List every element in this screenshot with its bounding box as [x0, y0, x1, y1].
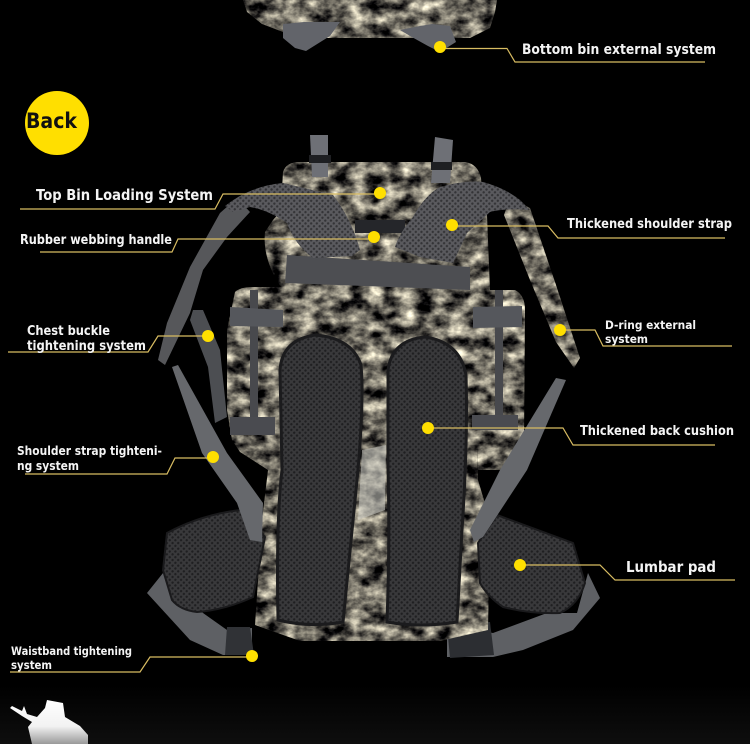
callout dots: [202, 41, 566, 662]
label: d-ring external system: [605, 318, 696, 346]
label: thickened back cushion: Thickened back cushion: [580, 424, 734, 439]
icon: soldier silhouette: [10, 700, 88, 744]
left side pocket: [227, 287, 290, 470]
label: thickened shoulder strap: Thickened shoulder strap: [567, 217, 732, 232]
rubber handle: [355, 220, 405, 233]
label: chest buckle tightening system: [27, 324, 146, 354]
right top tab: [431, 137, 453, 183]
label: chest buckle tightening system: tightening system: [27, 339, 146, 354]
left lumbar pad: [163, 510, 265, 612]
right shoulder strap: [504, 198, 580, 368]
tab buckle right: [431, 162, 452, 170]
back badge: Back: [26, 109, 78, 133]
top lid: [282, 162, 482, 190]
waist strap right: [447, 573, 600, 657]
label: shoulder strap tightening system: Shoulder strap tighteni-: [17, 444, 162, 458]
label: shoulder strap tightening system: [17, 444, 162, 473]
right pocket vertical strap: [495, 290, 503, 420]
lower right pocket band: [472, 415, 518, 430]
left back cushion: [278, 335, 362, 625]
lower left pocket band: [230, 417, 275, 435]
back badge: [25, 91, 89, 155]
label: d-ring external system: D-ring external: [605, 318, 696, 332]
left pocket band: [230, 307, 283, 327]
waist buckle left: [225, 627, 254, 655]
left tightening strap: [172, 365, 263, 542]
left shoulder strap: [158, 198, 250, 365]
right bottom webbing: [400, 24, 456, 52]
bottom bin of backpack: [243, 0, 497, 52]
grey back band: [285, 255, 470, 290]
waist strap left: [147, 573, 252, 655]
right shoulder pad: [395, 182, 530, 263]
tab buckle left: [309, 155, 331, 163]
left pocket vertical strap: [250, 290, 258, 420]
backpack body: [147, 135, 600, 658]
waist buckle right: [447, 622, 494, 658]
label: lumbar pad: Lumbar pad: [626, 558, 716, 576]
label: rubber webbing handle: Rubber webbing handle: [20, 233, 172, 248]
label: waistband tightening system: system: [11, 658, 52, 672]
label: waistband tightening system: [11, 644, 132, 672]
right side pocket: [470, 290, 525, 470]
pale bark patch: [358, 445, 386, 520]
label: waistband tightening system: Waistband tightening: [11, 644, 132, 658]
label: chest buckle tightening system: Chest buckle: [27, 324, 110, 339]
right back cushion: [387, 337, 466, 625]
left bottom webbing: [283, 22, 340, 51]
left top tab: [310, 135, 328, 177]
right pocket band: [473, 306, 522, 328]
left chest buckle strap: [190, 310, 227, 423]
right lumbar pad: [478, 515, 585, 613]
label: bottom bin external system: Bottom bin external system: [522, 42, 716, 58]
label: d-ring external system: system: [605, 332, 648, 346]
label: top bin loading system: Top Bin Loading System: [36, 186, 213, 204]
main body: [255, 280, 490, 641]
right tightening strap: [470, 378, 566, 542]
upper body: [265, 190, 490, 290]
label: shoulder strap tightening system: ng system: [17, 459, 79, 473]
left shoulder pad: [225, 183, 360, 258]
